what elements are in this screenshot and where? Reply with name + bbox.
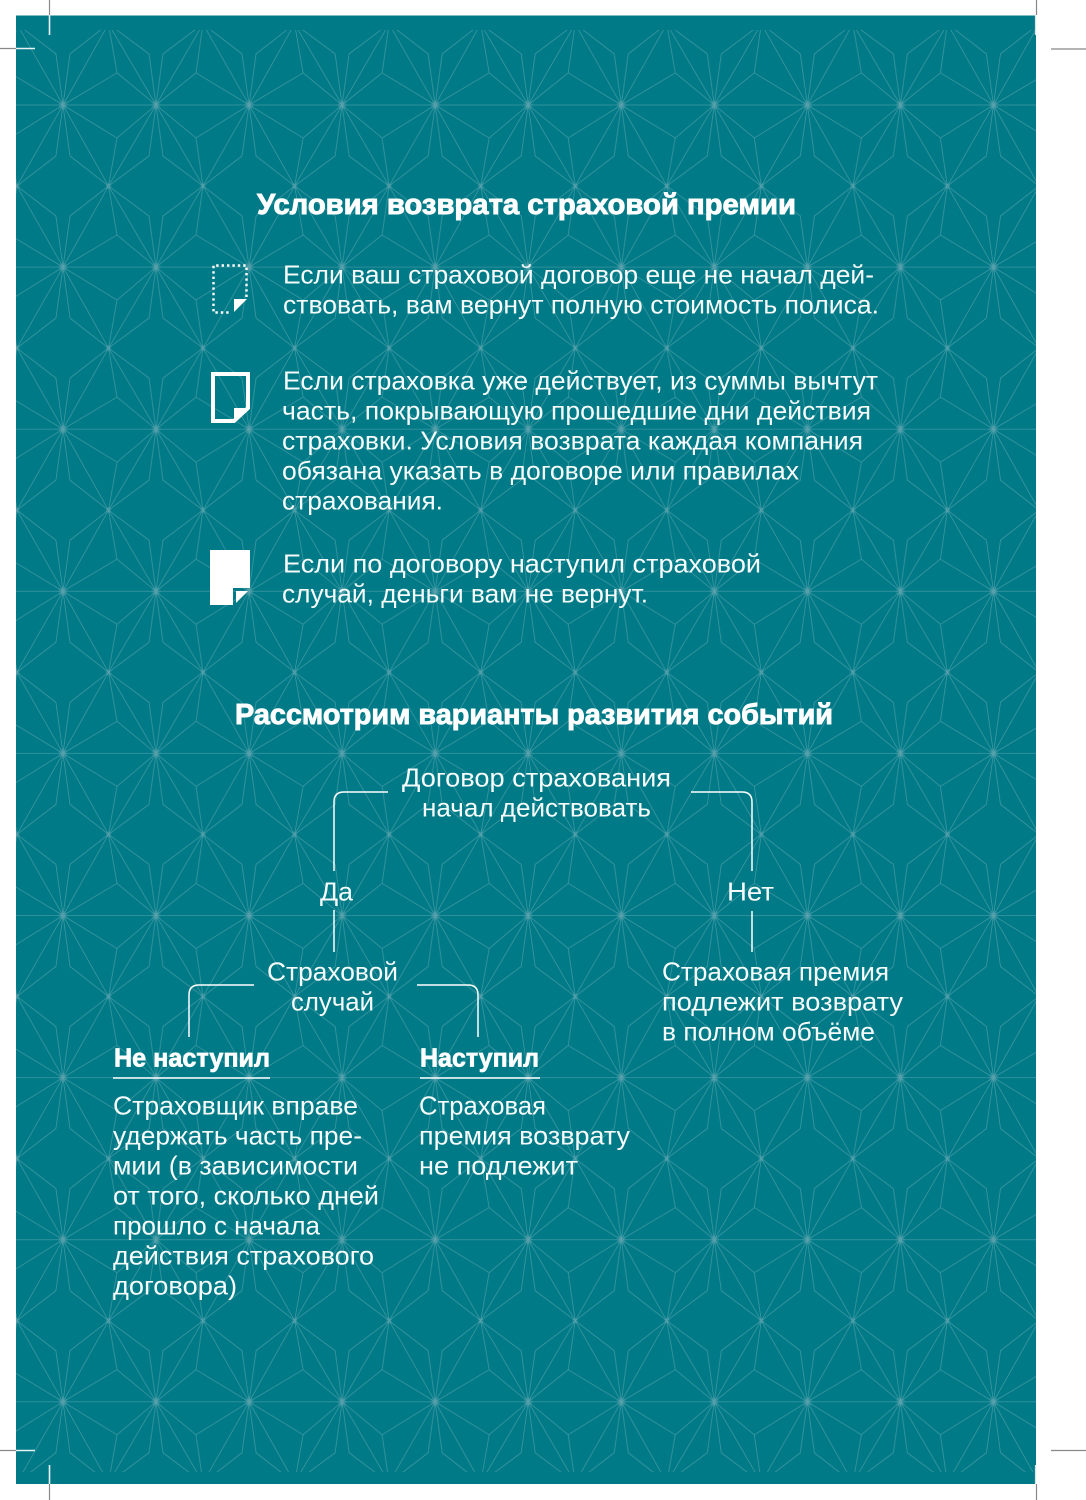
branch: not occurred: прошло с начала	[113, 1210, 321, 1240]
icon: outlined document	[213, 374, 249, 423]
text block: policy not yet active: ствовать, вам вернут полную стоимость полиса.	[283, 289, 879, 319]
branch: occurred: Наступил	[420, 1042, 539, 1072]
connector: yes to insured event	[333, 910, 335, 952]
branch: not occurred	[113, 1042, 379, 1300]
text block: insured event occurred: случай, деньги вам не вернут.	[282, 578, 648, 608]
connector: event to occurred	[417, 985, 478, 1037]
branch: not occurred: Страховщик вправе	[113, 1090, 358, 1120]
node: insured event: случай	[291, 986, 374, 1016]
branch: not occurred: Не наступил	[114, 1042, 270, 1072]
heading: refund conditions: Условия возврата страховой премии	[257, 189, 796, 221]
text block: policy not yet active	[283, 259, 879, 319]
text block: policy not yet active: Если ваш страховой договор еще не начал дей-	[283, 259, 874, 289]
root node: Договор страхования	[402, 762, 671, 792]
branch: not occurred: договора)	[113, 1270, 237, 1300]
node: insured event: Страховой	[267, 956, 398, 986]
root node	[402, 762, 671, 822]
branch: occurred: не подлежит	[419, 1150, 578, 1180]
node: full refund: Страховая премия	[662, 956, 889, 986]
connector: event to not occurred	[189, 985, 254, 1037]
node: full refund: подлежит возврату	[662, 986, 903, 1016]
node: full refund	[662, 956, 903, 1046]
root node: начал действовать	[422, 792, 651, 822]
branch: not occurred: удержать часть пре-	[113, 1120, 362, 1150]
branch: not occurred: мии (в зависимости	[113, 1150, 358, 1180]
node: full refund: в полном объёме	[662, 1016, 875, 1046]
connector: no to full refund	[751, 911, 753, 952]
text block: insured event occurred: Если по договору наступил страховой	[283, 548, 761, 578]
heading: scenarios: Рассмотрим варианты развития событий	[235, 699, 833, 731]
branch: occurred: Страховая	[419, 1090, 546, 1120]
branch: not occurred: от того, сколько дней	[113, 1180, 379, 1210]
icon: filled document	[210, 550, 250, 605]
label: yes: Да	[320, 876, 354, 906]
icon: dotted document	[214, 266, 247, 312]
connector: root to no	[691, 792, 752, 871]
text block: policy already active: Если страховка уже действует, из суммы вычтут	[283, 365, 878, 395]
text block: policy already active: обязана указать в договоре или правилах	[282, 455, 799, 485]
text block: policy already active: страховки. Условия возврата каждая компания	[282, 425, 863, 455]
label: no: Нет	[727, 876, 774, 906]
connector: root to yes	[334, 792, 388, 871]
node: insured event	[267, 956, 398, 1016]
text block: policy already active	[282, 365, 878, 515]
text block: policy already active: часть, покрывающую прошедшие дни действия	[282, 395, 871, 425]
branch: not occurred: действия страхового	[113, 1240, 374, 1270]
branch: occurred: премия возврату	[419, 1120, 630, 1150]
text block: policy already active: страхования.	[282, 485, 443, 515]
branch: occurred	[419, 1042, 630, 1180]
text block: insured event occurred	[282, 548, 761, 608]
flowchart	[113, 762, 903, 1300]
